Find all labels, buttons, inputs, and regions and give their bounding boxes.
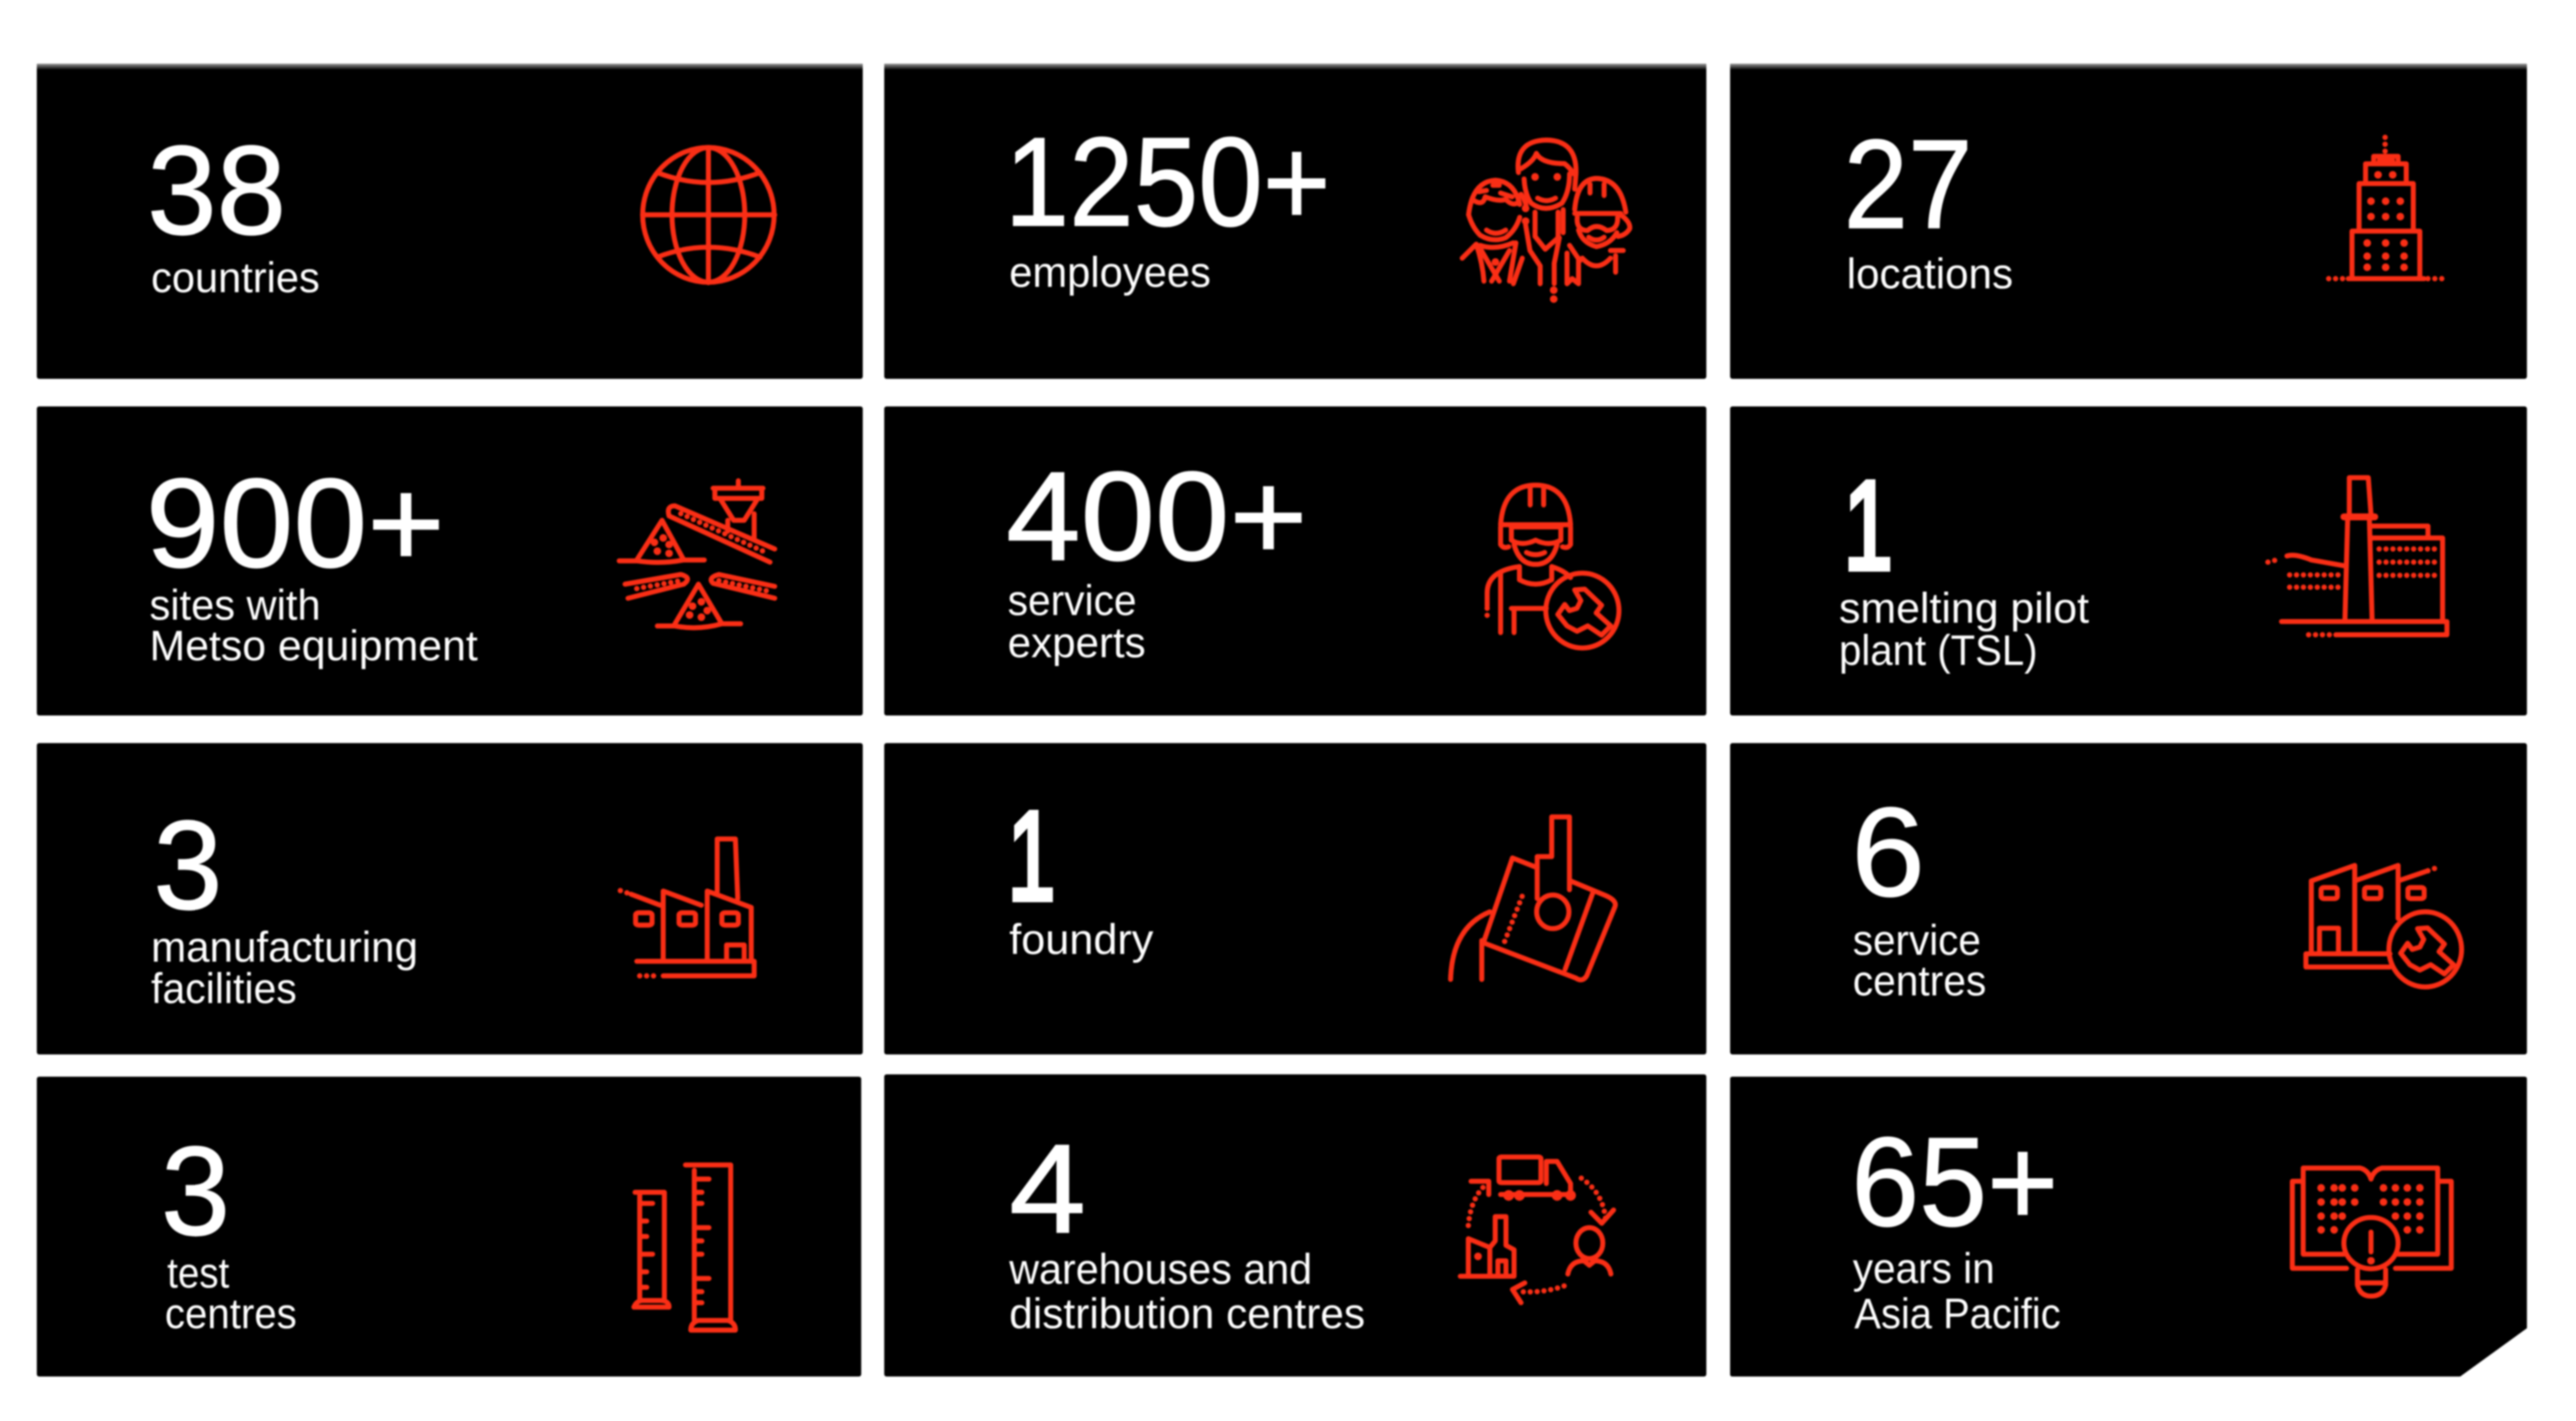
value: 4: 4: [1009, 1118, 1086, 1259]
panel: smelting pilot plant: [1730, 406, 2527, 715]
icon: factory: [620, 839, 754, 976]
value: 900+: 900+: [146, 452, 445, 594]
label: warehouses and distribution centres: distribution centres: [1009, 1289, 1365, 1337]
value: 38: 38: [147, 120, 286, 261]
label: foundry: foundry: [1009, 915, 1153, 963]
icon: factory with wrench: [2306, 866, 2462, 987]
panel: manufacturing facilities: [37, 743, 863, 1054]
value: 400+: 400+: [1006, 446, 1308, 587]
label: manufacturing facilities: [151, 923, 418, 1012]
label: locations: locations: [1847, 249, 2013, 298]
label: service centres: [1853, 916, 1986, 1005]
panel: test centres: [37, 1077, 861, 1377]
panel: foundry: [884, 743, 1706, 1054]
label: years in Asia Pacific: [1853, 1244, 2061, 1337]
label: years in Asia Pacific: years in: [1853, 1244, 1995, 1292]
value: 3: 3: [161, 1120, 230, 1261]
label: warehouses and distribution centres: warehouses and: [1008, 1245, 1312, 1293]
label: warehouses and distribution centres: [1008, 1245, 1365, 1337]
label: service experts: service: [1008, 576, 1137, 624]
label: manufacturing facilities: manufacturing: [151, 923, 418, 971]
label: employees: employees: [1009, 248, 1211, 296]
label: service centres: service: [1853, 916, 1981, 964]
label: sites with Metso equipment: Metso equipment: [150, 621, 478, 669]
panel: years in Asia Pacific: [1730, 1077, 2527, 1377]
label: sites with Metso equipment: [150, 581, 478, 669]
value: 27: 27: [1844, 113, 1972, 255]
icon: measuring cylinders: [634, 1165, 735, 1331]
icon: distribution cycle: [1460, 1157, 1614, 1303]
label: test centres: centres: [165, 1289, 297, 1337]
value: 6: 6: [1851, 781, 1925, 923]
label: smelting pilot plant (TSL): smelting pilot: [1839, 584, 2089, 632]
icon: worker with wrench: [1487, 485, 1619, 648]
icon: open book with light bulb: [2292, 1168, 2451, 1296]
value: 1: 1: [1844, 455, 1893, 596]
icon: smelter plant: [2268, 478, 2447, 635]
label: test centres: [165, 1248, 297, 1337]
icon: conveyors and stockpiles: [619, 481, 775, 628]
label: service experts: experts: [1008, 618, 1146, 666]
label: test centres: test: [167, 1248, 229, 1297]
value: 3: 3: [153, 794, 222, 936]
panel: warehouses and distribution centres: [884, 1074, 1706, 1377]
panel: locations: [1730, 64, 2527, 379]
label: smelting pilot plant (TSL): plant (TSL): [1839, 626, 2038, 674]
value: 1250+: 1250+: [1005, 111, 1331, 252]
value: 65+: 65+: [1851, 1111, 2058, 1252]
icon: three workers: [1462, 140, 1630, 299]
icon: foundry ladle: [1450, 817, 1615, 980]
panel: service centres: [1730, 743, 2527, 1054]
label: years in Asia Pacific: Asia Pacific: [1854, 1289, 2061, 1337]
icon: globe: [643, 147, 775, 283]
panel: sites with Metso equipment: [37, 406, 863, 715]
label: service experts: [1008, 576, 1146, 666]
label: service centres: centres: [1853, 956, 1986, 1005]
value: 1: 1: [1008, 785, 1055, 926]
icon: office tower: [2329, 137, 2443, 278]
label: manufacturing facilities: facilities: [151, 964, 297, 1012]
panel: employees: [884, 64, 1706, 379]
panel: countries: [37, 64, 863, 379]
panel: service experts: [884, 406, 1706, 715]
label: countries: countries: [151, 253, 320, 301]
label: sites with Metso equipment: sites with: [150, 581, 321, 629]
label: smelting pilot plant (TSL): [1839, 584, 2089, 674]
